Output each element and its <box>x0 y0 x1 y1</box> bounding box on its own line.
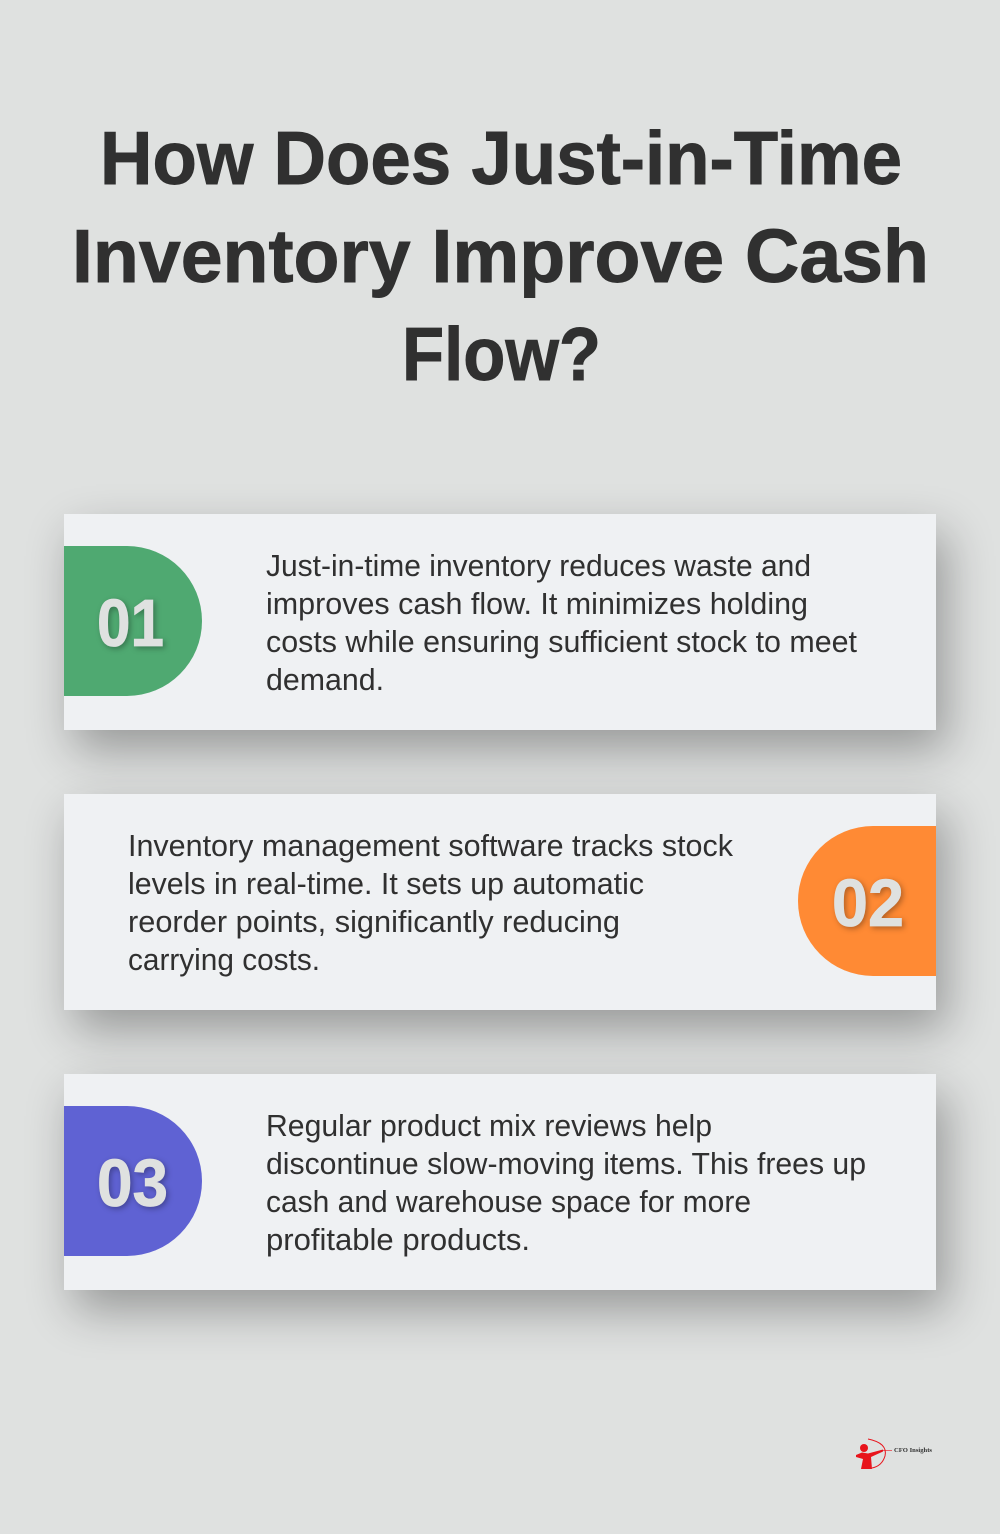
text block: step 02 <box>128 828 733 977</box>
icon: red archer <box>856 1439 892 1469</box>
logo text: CFO Insights <box>894 1448 933 1454</box>
badge: step 03: 03 <box>97 1146 168 1221</box>
panel: step 01 <box>64 546 857 697</box>
text block: step 03: discontinue slow-moving items. This frees up <box>266 1146 866 1181</box>
badge: step 01 <box>64 546 202 696</box>
text block: step 02: carrying costs. <box>128 942 320 977</box>
text block: step 01: improves cash flow. It minimizes holding <box>266 586 808 621</box>
badge: step 01: 01 <box>97 586 164 661</box>
text block: step 01: demand. <box>266 662 384 697</box>
badge: step 02: 02 <box>832 866 904 941</box>
title: How Does Just-in-Time <box>100 116 902 200</box>
text block: step 03: Regular product mix reviews help <box>266 1108 712 1143</box>
panel: step 02 <box>128 826 936 977</box>
text block: step 03: cash and warehouse space for more <box>266 1184 751 1219</box>
panel background: card 1 <box>64 514 936 730</box>
panel background: card 2 <box>64 794 936 1010</box>
text block: step 02: reorder points, significantly reducing <box>128 904 620 939</box>
badge: step 02 <box>798 826 936 976</box>
text block: step 01 <box>266 548 857 697</box>
panel: step 03 <box>64 1106 866 1257</box>
panel background: card 3 <box>64 1074 936 1290</box>
text block: step 01: Just-in-time inventory reduces waste and <box>266 548 811 583</box>
badge: step 03 <box>64 1106 202 1256</box>
logo: CFO Insights <box>856 1439 933 1469</box>
title: Flow? <box>402 312 601 396</box>
text block: step 01: costs while ensuring sufficient stock to meet <box>266 624 857 659</box>
text block: step 02: Inventory management software tracks stock <box>128 828 733 863</box>
text block: step 03: profitable products. <box>266 1222 530 1257</box>
title: Inventory Improve Cash <box>72 214 929 298</box>
text block: step 03 <box>266 1108 866 1257</box>
text block: step 02: levels in real-time. It sets up automatic <box>128 866 644 901</box>
title <box>72 116 929 396</box>
